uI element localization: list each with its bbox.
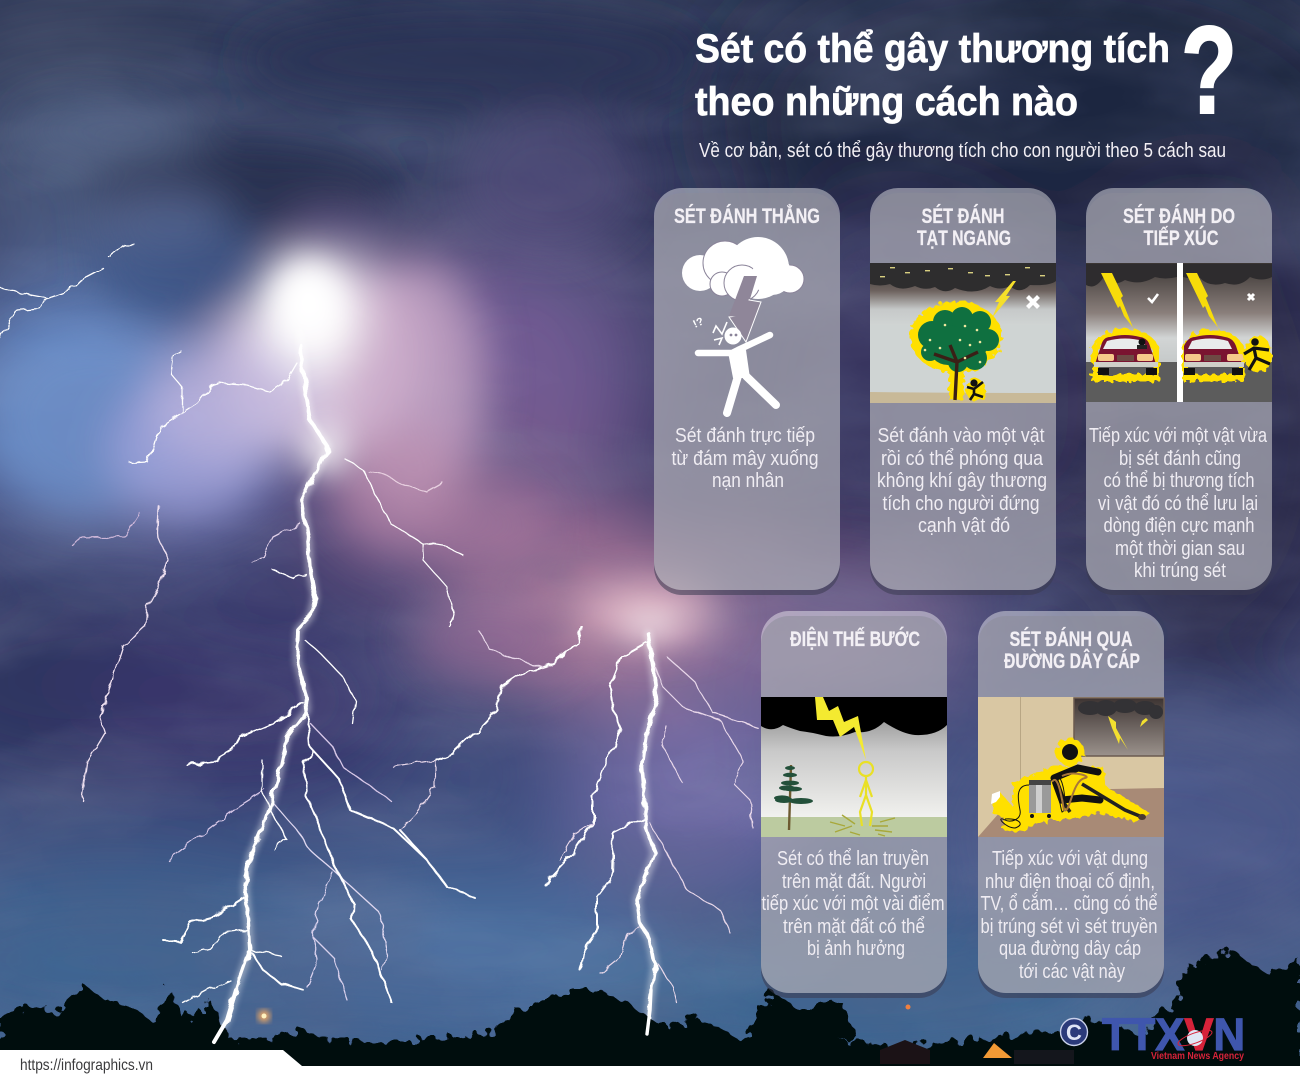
title — [695, 27, 1170, 124]
illustration: cars — [1086, 263, 1272, 402]
distant street light and house — [258, 1004, 1074, 1064]
body text — [877, 425, 1047, 537]
second lightning bolt — [393, 627, 757, 1033]
logo: TTXVN: C — [1066, 1020, 1082, 1045]
body text — [1089, 425, 1268, 582]
footer band — [0, 1050, 1300, 1077]
body text: dòng điện cực mạnh — [1104, 515, 1254, 537]
heading: SÉT ĐÁNH QUA — [1010, 628, 1132, 651]
panel: side flash — [870, 188, 1056, 595]
illustration: tree side flash — [870, 263, 1056, 403]
body text: Tiếp xúc với vật dụng — [992, 848, 1148, 870]
body text: như điện thoại cố định, — [985, 871, 1155, 893]
subtitle: Về cơ bản, sét có thể gây thương tích cho con người theo 5 cách sau — [699, 140, 1226, 162]
lightning over tree tops — [214, 990, 651, 1042]
body text: từ đám mây xuống — [672, 448, 818, 470]
body text: vì vật đó có thể lưu lại — [1098, 493, 1258, 515]
heading: ĐIỆN THẾ BƯỚC — [790, 627, 920, 651]
body text: trên mặt đất. Người — [782, 871, 926, 893]
logo: TTXVN: TTXVN — [1102, 1009, 1245, 1060]
heading: SÉT ĐÁNH DO — [1123, 205, 1235, 228]
body text: TV, ổ cắm… cũng có thể — [980, 892, 1158, 915]
main lightning bolt — [0, 245, 475, 1042]
body text: khi trúng sét — [1134, 560, 1226, 582]
heading: SÉT ĐÁNH — [922, 205, 1004, 228]
question mark: ? — [1181, 2, 1237, 140]
heading: TIẾP XÚC — [1144, 226, 1218, 250]
title: theo những cách nào — [695, 80, 1078, 124]
illustration: indoor appliance — [978, 697, 1164, 837]
body text: Sét có thể lan truyền — [777, 848, 929, 870]
body text — [762, 848, 944, 960]
body text: bị trúng sét vì sét truyền — [980, 916, 1158, 938]
title: Sét có thể gây thương tích — [695, 27, 1170, 71]
tree line silhouette — [0, 950, 1300, 1075]
panel: contact strike — [1086, 188, 1272, 595]
heading — [1123, 205, 1235, 250]
lightning glow — [213, 330, 657, 1042]
body text: trên mặt đất có thể — [783, 916, 925, 938]
body text: có thể bị thương tích — [1104, 470, 1254, 492]
body text: tích cho người đứng — [882, 493, 1040, 515]
body text — [980, 848, 1158, 983]
body text: qua đường dây cáp — [999, 938, 1141, 960]
body text: bị sét đánh cũng — [1119, 448, 1241, 470]
panel: step voltage — [761, 611, 947, 998]
heading: TẠT NGANG — [917, 227, 1011, 250]
heading — [1004, 628, 1140, 673]
body text: Sét đánh vào một vật — [878, 425, 1045, 447]
icon: person struck from cloud — [682, 237, 804, 413]
website url: https://infographics.vn — [20, 1057, 153, 1074]
body text — [672, 425, 818, 492]
body text: một thời gian sau — [1115, 538, 1245, 560]
body text: nạn nhân — [712, 470, 784, 492]
body text: cạnh vật đó — [918, 515, 1010, 537]
body text: rồi có thể phóng qua — [881, 448, 1044, 470]
heading: SÉT ĐÁNH THẲNG — [674, 205, 820, 228]
body text: bị ảnh hưởng — [807, 938, 905, 960]
heading: ĐƯỜNG DÂY CÁP — [1004, 649, 1140, 673]
icon: person struck from cloud: !? — [691, 315, 706, 331]
logo: TTXVN: Vietnam News Agency — [1151, 1051, 1244, 1062]
body text: tiếp xúc với một vài điểm — [762, 893, 944, 915]
illustration: ground current — [761, 697, 947, 837]
panel: strike through cables — [978, 611, 1164, 998]
body text: không khí gây thương — [877, 470, 1047, 492]
body text: Sét đánh trực tiếp — [675, 425, 815, 447]
body text: tới các vật này — [1019, 961, 1125, 983]
heading — [917, 205, 1011, 250]
panel: direct strike — [654, 188, 840, 595]
